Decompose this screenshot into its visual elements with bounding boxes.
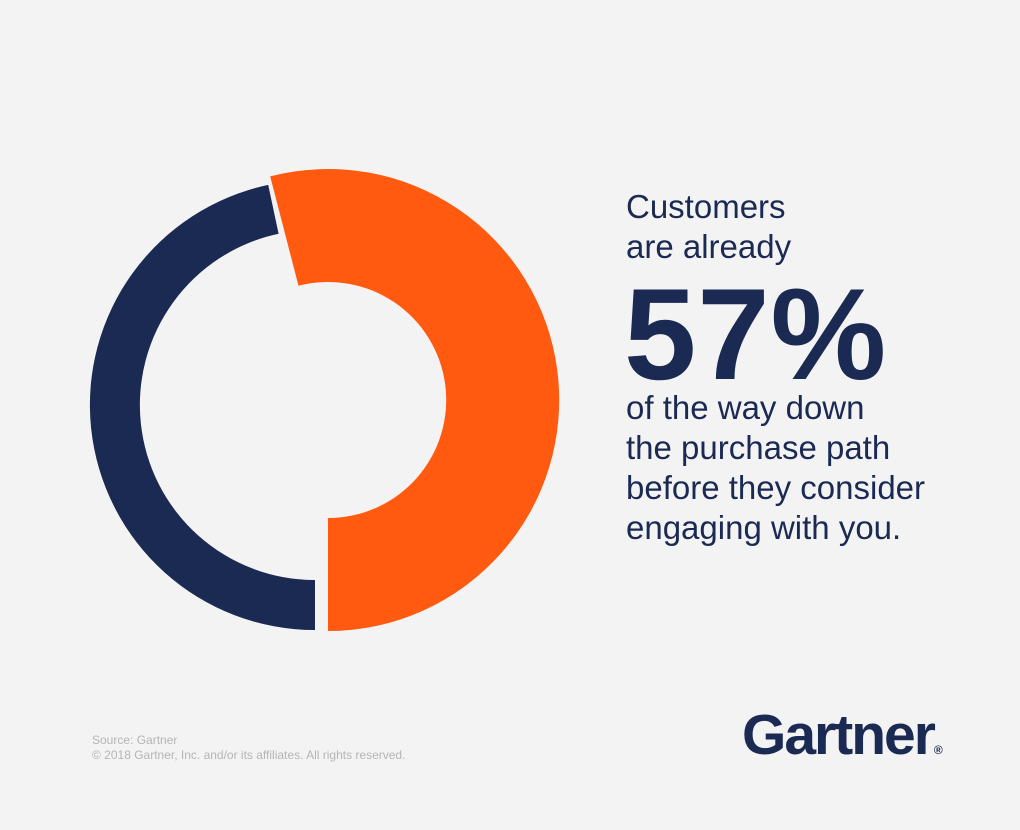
navy segment xyxy=(90,185,315,630)
source footer xyxy=(92,733,405,762)
orange segment xyxy=(270,169,559,631)
source footer: © 2018 Gartner, Inc. and/or its affiliates. All rights reserved. xyxy=(92,748,405,762)
text: description: the purchase path xyxy=(626,429,890,466)
text: description: engaging with you. xyxy=(626,509,901,546)
text: intro: Customers xyxy=(626,188,786,225)
text: description xyxy=(626,389,925,546)
text: intro: are already xyxy=(626,228,791,265)
source footer: Source: Gartner xyxy=(92,733,177,747)
logo: Gartner: Gartner® xyxy=(742,703,943,767)
text: description: before they consider xyxy=(626,469,925,506)
big number: 57% xyxy=(624,261,887,407)
text: description: of the way down xyxy=(626,389,864,426)
text: intro xyxy=(626,188,791,265)
